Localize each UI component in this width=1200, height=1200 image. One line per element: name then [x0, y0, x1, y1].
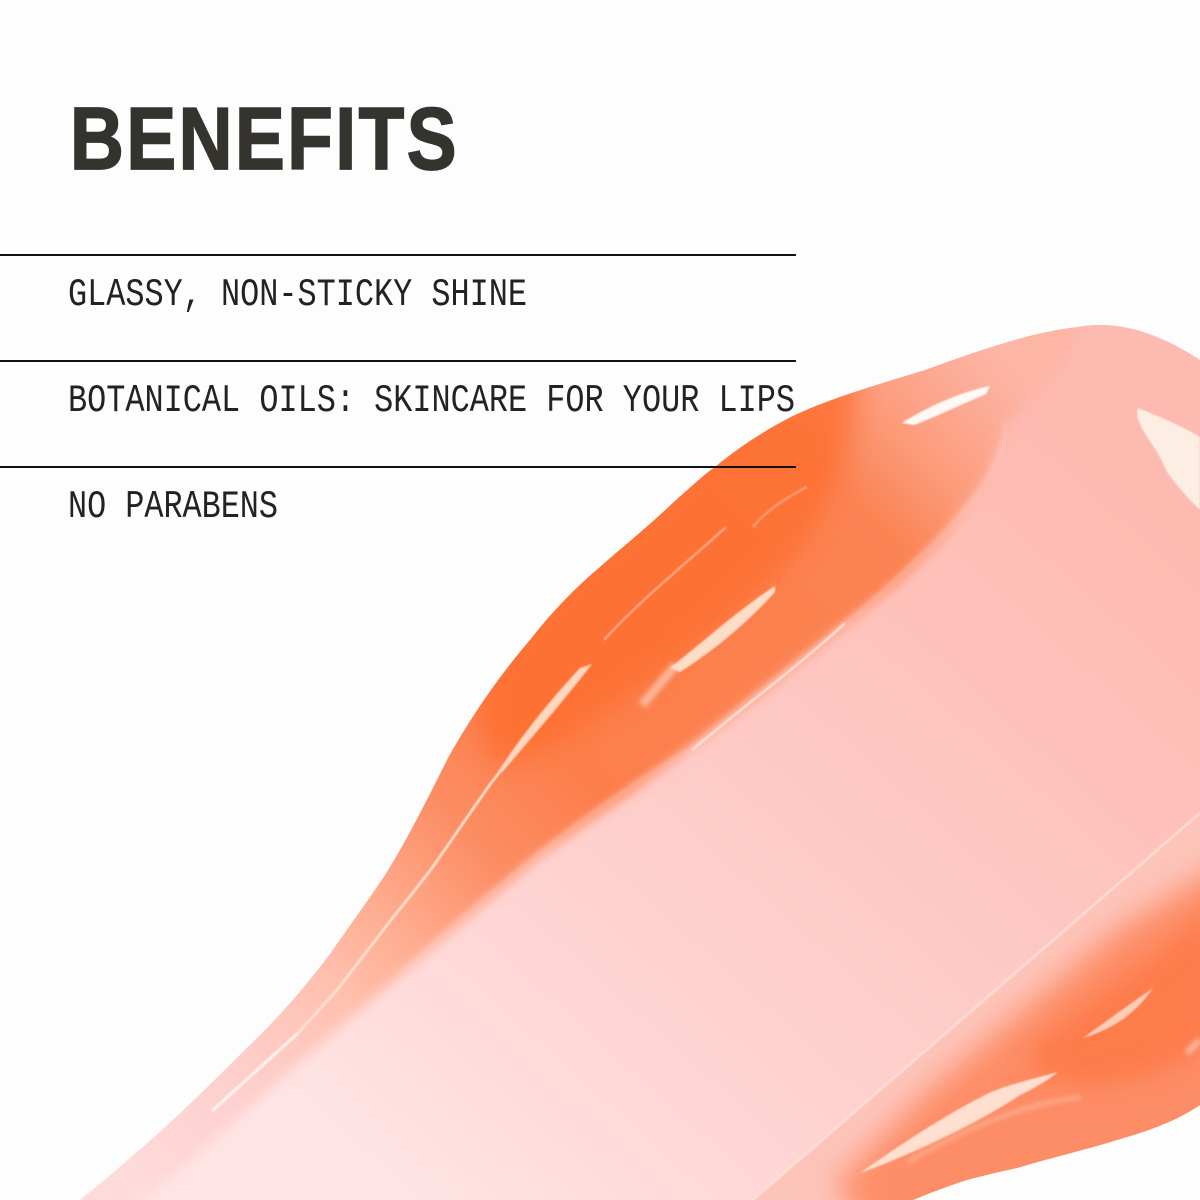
smear orange core [478, 380, 860, 765]
lip gloss smear image [0, 300, 1200, 1200]
highlight: faint upper streak [753, 487, 807, 527]
crease line [753, 813, 1200, 1200]
smear corner [754, 857, 1200, 1200]
highlight: bottom streak [860, 1072, 1058, 1173]
highlight: long streak top thick [498, 664, 592, 772]
benefit: shine: GLASSY, NON-STICKY SHINE [68, 273, 527, 317]
divider 2 [0, 360, 796, 362]
corner base [754, 953, 1200, 1200]
highlight: long streak [298, 764, 508, 1034]
highlight: top right [1137, 408, 1200, 510]
highlight: bottom faint streak [907, 1097, 1080, 1163]
highlight: long streak tail [212, 1033, 298, 1111]
title: BENEFITS [70, 89, 459, 188]
smear base [142, 324, 1200, 1200]
highlight: thin streak [604, 527, 726, 640]
divider 3 [0, 466, 796, 468]
divider 1 [0, 254, 796, 256]
highlight: corner streak [1083, 988, 1153, 1038]
highlight: inner edge line [692, 623, 845, 750]
corner core [1029, 900, 1200, 1085]
benefit: no parabens: NO PARABENS [68, 485, 278, 529]
corner blurred orange [835, 860, 1200, 1200]
smear band soft inner boundary [400, 420, 1005, 975]
highlight: right edge [1187, 1040, 1200, 1053]
highlight: top streak [902, 386, 990, 425]
highlight: central streak tail [642, 665, 676, 705]
highlight: central streak [670, 586, 775, 672]
smear edge band [30, 300, 1090, 1200]
benefit: botanical oils: BOTANICAL OILS: SKINCARE FOR YOUR LIPS [68, 379, 795, 423]
